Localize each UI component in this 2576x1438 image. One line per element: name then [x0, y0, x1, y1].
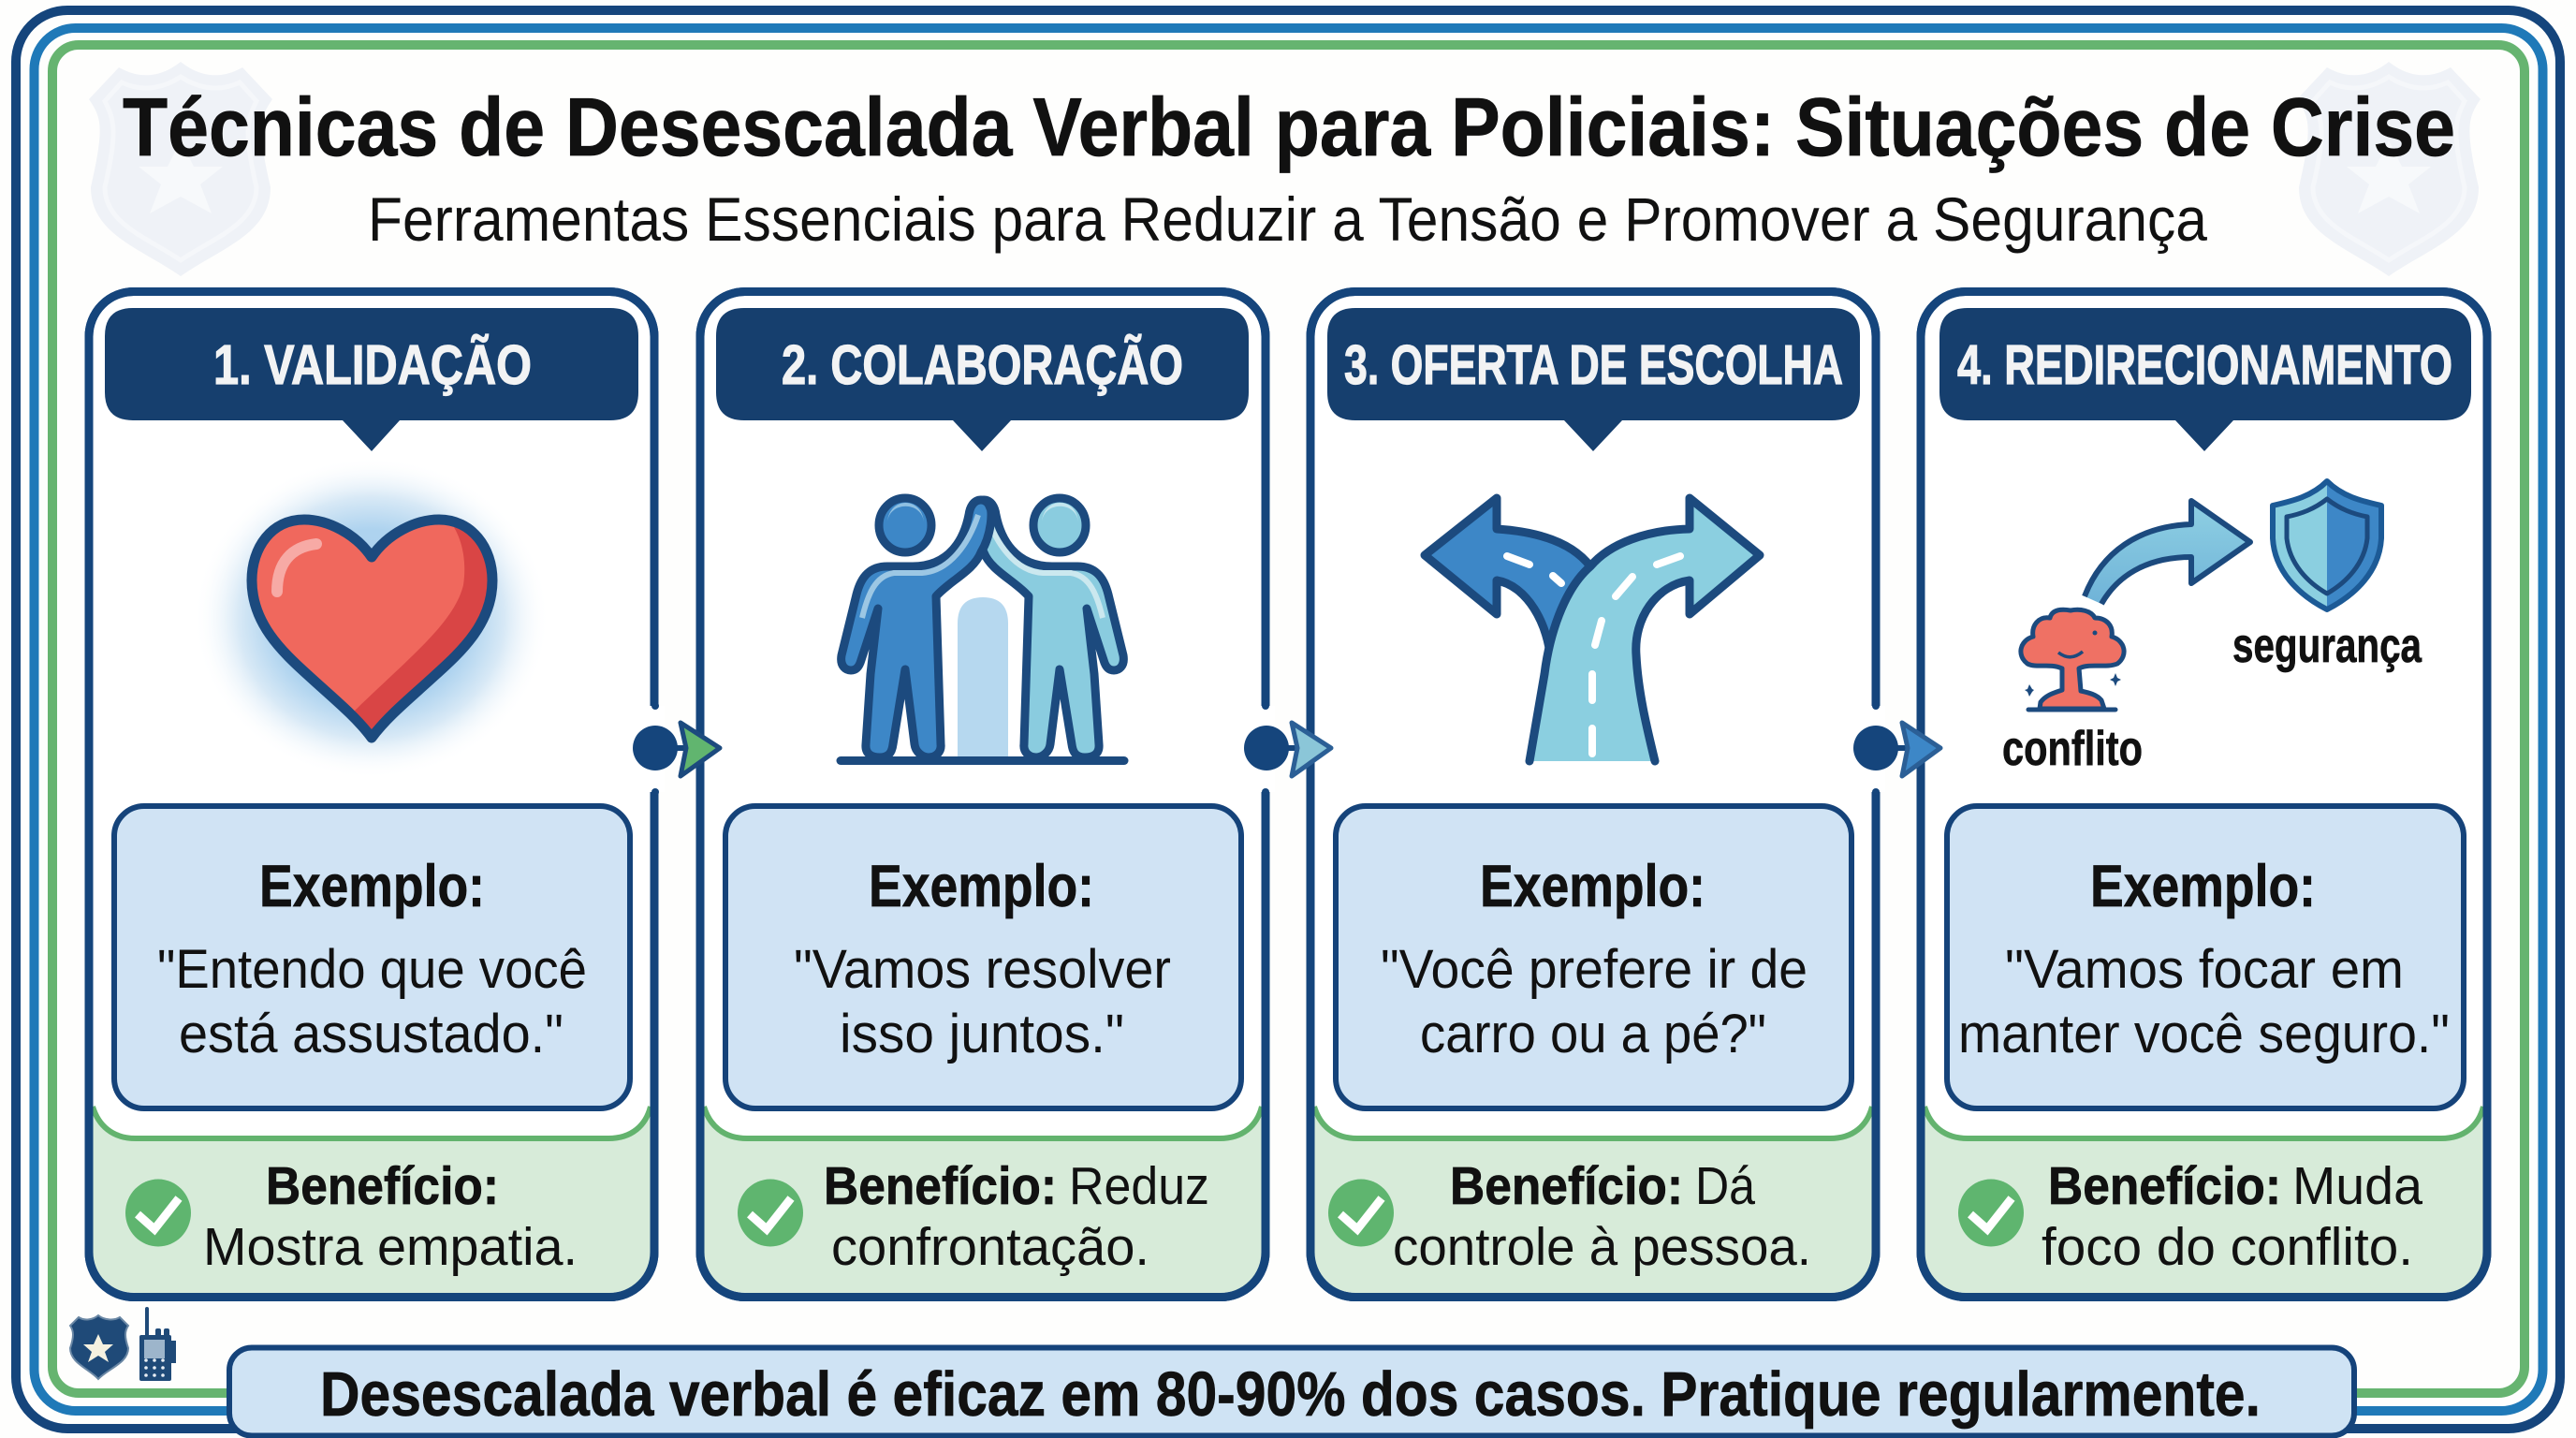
panel: 3. oferta de escolha: "Você prefere ir de	[1381, 939, 1808, 1000]
header	[716, 308, 1249, 451]
footer banner: Desescalada verbal é eficaz em 80-90% dos casos. Pratique regularmente.	[320, 1359, 2261, 1430]
benefit check icon	[1958, 1180, 2024, 1247]
icon: small radio	[139, 1309, 176, 1381]
icon: curved arrow	[2085, 501, 2250, 604]
panel: 2. colaboração: confrontação.	[831, 1217, 1149, 1277]
example box	[725, 806, 1241, 1108]
panel: 4. redirecionamento	[1921, 292, 2487, 1298]
icon: small police badge	[70, 1315, 128, 1379]
panel: 3. oferta de escolha	[1310, 292, 1876, 1298]
panel: 1. validação: 1. VALIDAÇÃO	[213, 334, 532, 396]
panel: 1. validação: Mostra empatia.	[203, 1217, 578, 1277]
panel: 4. redirecionamento: foco do conflito.	[2042, 1217, 2413, 1277]
card frame	[700, 292, 1266, 1298]
panel: 1. validação: Exemplo:	[259, 854, 485, 919]
panel: 2. colaboração: "Vamos resolver	[794, 939, 1171, 1000]
panel: 3. oferta de escolha: Exemplo:	[1480, 854, 1705, 919]
benefit band	[93, 1107, 651, 1293]
benefit text: Benefício:	[2048, 1156, 2281, 1216]
panel: 4. redirecionamento: Muda	[2292, 1156, 2422, 1216]
example box	[1947, 806, 2464, 1108]
benefit text: Benefício:	[266, 1156, 499, 1216]
panel: 1. validação	[89, 292, 654, 1298]
card frame	[1310, 292, 1876, 1298]
arrow: connector 1 to 2	[633, 702, 720, 796]
panel: 2. colaboração	[700, 292, 1266, 1298]
benefit check icon	[1328, 1180, 1394, 1247]
arrow: connector 2 to 3	[1244, 702, 1331, 796]
panel: 3. oferta de escolha: 3. OFERTA DE ESCOLHA	[1344, 334, 1843, 396]
benefit band	[704, 1107, 1262, 1293]
panel: 3. oferta de escolha: Dá	[1695, 1156, 1755, 1216]
benefit text: Benefício:	[1450, 1156, 1683, 1216]
panel: 3. oferta de escolha: carro ou a pé?"	[1420, 1004, 1766, 1064]
subtitle: Ferramentas Essenciais para Reduzir a Tensão e Promover a Segurança	[368, 184, 2207, 254]
icon: safety shield	[2273, 477, 2381, 613]
icon: forked road arrows	[1425, 498, 1760, 761]
icon: two people high five	[841, 498, 1124, 760]
header	[1939, 308, 2471, 451]
example box	[1336, 806, 1852, 1108]
panel: 4. redirecionamento: "Vamos focar em	[2005, 939, 2404, 1000]
header	[105, 308, 638, 451]
arrow: connector 3 to 4	[1853, 702, 1940, 796]
panel: 3. oferta de escolha: controle à pessoa.	[1393, 1217, 1811, 1277]
benefit text: Benefício:	[824, 1156, 1057, 1216]
watermark: right police shield	[2297, 62, 2481, 276]
header	[1327, 308, 1860, 451]
label: conflito: conflito	[2002, 722, 2143, 776]
benefit check icon	[125, 1180, 191, 1247]
benefit band	[1925, 1107, 2483, 1293]
icon: explosion	[2021, 609, 2124, 710]
watermark: left police shield	[89, 62, 272, 276]
icon: heart	[214, 476, 530, 760]
example box	[114, 806, 630, 1108]
panel: 2. colaboração: 2. COLABORAÇÃO	[782, 334, 1183, 396]
benefit band	[1314, 1107, 1872, 1293]
card frame	[89, 292, 654, 1298]
card frame	[1921, 292, 2487, 1298]
panel: 1. validação: "Entendo que você	[157, 939, 587, 1000]
panel: 1. validação: está assustado."	[179, 1004, 564, 1064]
panel: 2. colaboração: isso juntos."	[840, 1004, 1124, 1064]
panel: 4. redirecionamento: Exemplo:	[2090, 854, 2316, 919]
panel: 2. colaboração: Exemplo:	[869, 854, 1094, 919]
panel: 2. colaboração: Reduz	[1069, 1156, 1209, 1216]
benefit check icon	[738, 1180, 803, 1247]
panel: 4. redirecionamento: manter você seguro."	[1958, 1004, 2450, 1064]
label: segurança: segurança	[2232, 619, 2422, 673]
